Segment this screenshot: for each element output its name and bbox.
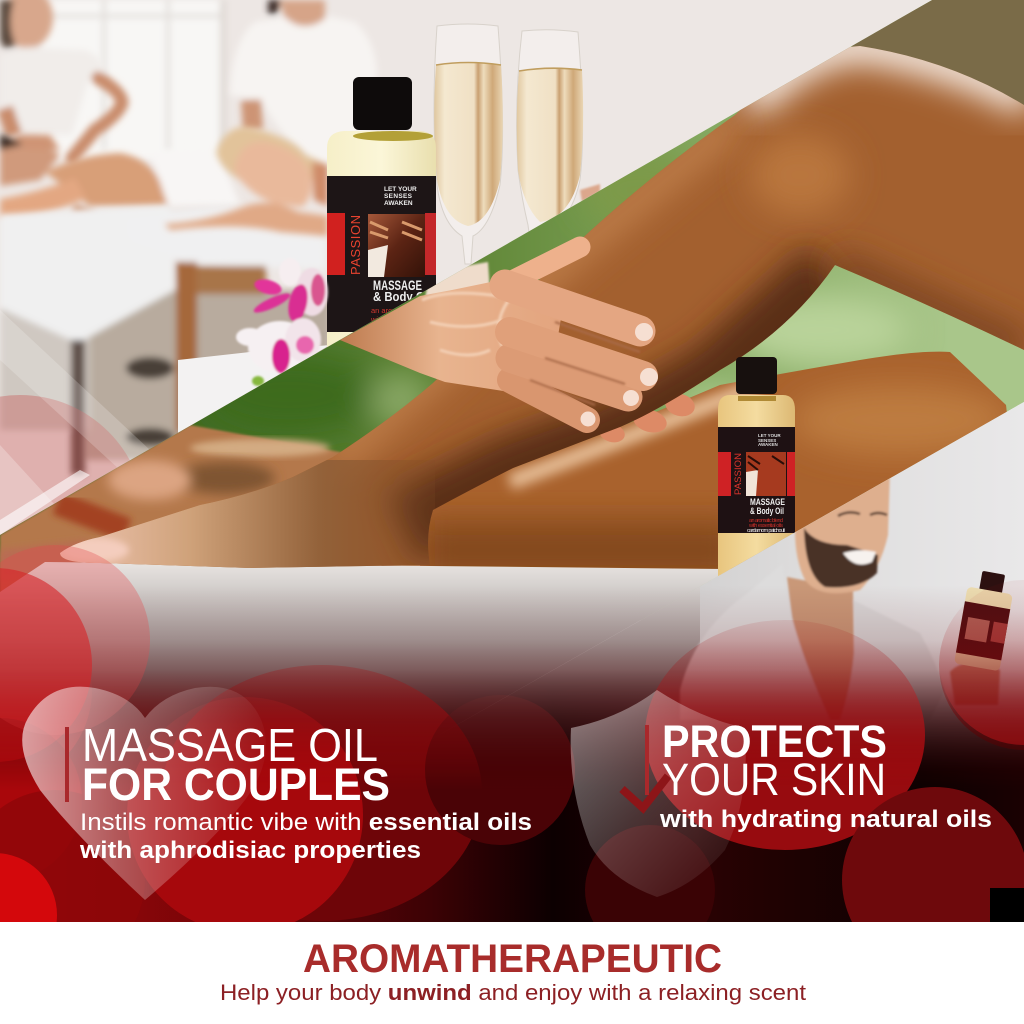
red bokeh overlay — [0, 545, 1024, 922]
product bottle: massage and body oil: an aromatic blend — [749, 518, 783, 524]
white side box — [178, 345, 330, 433]
product bottle: passion massage oil — [327, 77, 436, 360]
champagne flute left — [434, 24, 503, 264]
pale cloth near wrist — [425, 262, 490, 298]
product bottle: massage and body oil: AWAKEN — [758, 442, 778, 447]
accent bar: right — [645, 725, 649, 795]
product bottle: massage and body oil: MASSAGE — [750, 497, 785, 508]
lower fingertips of other hand — [600, 394, 695, 442]
product bottle: passion massage oil: & Body Oil — [373, 289, 431, 304]
background bokeh — [200, 150, 910, 435]
product bottle: massage and body oil — [718, 357, 795, 600]
footer heading: AROMATHERAPEUTIC — [303, 937, 722, 981]
rear foot — [0, 424, 420, 592]
product bottle: massage and body oil: cardamom patchouli — [747, 528, 785, 534]
product bottle: massage and body oil: SENSES — [758, 438, 776, 443]
thumb of other hand — [510, 247, 580, 282]
massage table surface — [0, 562, 730, 742]
panel: couple massage scene — [0, 0, 932, 535]
right therapist — [230, 0, 377, 168]
heading: massage oil for couples: FOR COUPLES — [82, 759, 390, 810]
front leg: foot, shin, knee and thigh — [60, 46, 1024, 568]
massaging hand — [340, 276, 658, 426]
orchid flowers — [236, 258, 328, 386]
text block: couples description: Instils romantic vibe with essential oils — [80, 809, 532, 836]
product bottle: passion massage oil: PASSION — [348, 215, 363, 275]
hand holding bottle — [950, 663, 1000, 705]
text block: couples description — [79, 809, 532, 864]
product bottle: passion massage oil: SENSES — [384, 193, 413, 200]
product bottle: passion massage oil: AWAKEN — [384, 200, 413, 207]
heading: protects your skin: PROTECTS — [662, 716, 887, 767]
woman on massage table — [165, 127, 328, 236]
product bottle: passion massage oil: LET YOUR — [384, 186, 417, 193]
product bottle: passion massage oil: with essential oils — [370, 315, 430, 324]
product bottle: passion massage oil: MASSAGE — [373, 277, 422, 293]
product bottle: massage and body oil: & Body Oil — [750, 506, 784, 516]
icon: heart — [22, 687, 266, 900]
man in bathrobe — [680, 470, 945, 720]
pink translucent reflection — [0, 312, 149, 535]
heading: massage oil for couples — [82, 719, 390, 810]
translucent red circles — [0, 545, 1024, 780]
deep red base — [0, 676, 1024, 922]
heading: massage oil for couples: MASSAGE OIL — [82, 719, 378, 771]
panel: smiling man with bottle — [454, 402, 1024, 746]
massage tables — [0, 205, 331, 475]
rear leg — [420, 340, 1024, 580]
product bottle: massage and body oil: LET YOUR — [758, 433, 781, 438]
text block: couples description: with aphrodisiac properties — [79, 837, 421, 864]
text block: protects description: with hydrating natural oils — [659, 806, 992, 833]
left therapist — [0, 0, 122, 158]
blurred arm behind glasses — [580, 184, 600, 202]
product bottle: massage and body oil: with essential oils — [748, 523, 783, 529]
window — [40, 0, 226, 160]
heading: protects your skin — [662, 716, 887, 805]
product bottle: passion massage oil: an aromatic blend — [371, 306, 431, 315]
olive backdrop — [850, 0, 1024, 110]
small bottle in hand — [954, 569, 1016, 671]
footer subtext: Help your body unwind and enjoy with a relaxing scent — [220, 980, 806, 1005]
man on massage table — [0, 134, 240, 217]
accent bar: left — [65, 727, 69, 802]
icon: shield with check — [571, 690, 746, 897]
product bottle: massage and body oil: PASSION — [733, 453, 744, 495]
panel: leg massage photo — [0, 0, 1024, 742]
heading: protects your skin: YOUR SKIN — [662, 754, 886, 805]
champagne flute right — [517, 30, 583, 240]
